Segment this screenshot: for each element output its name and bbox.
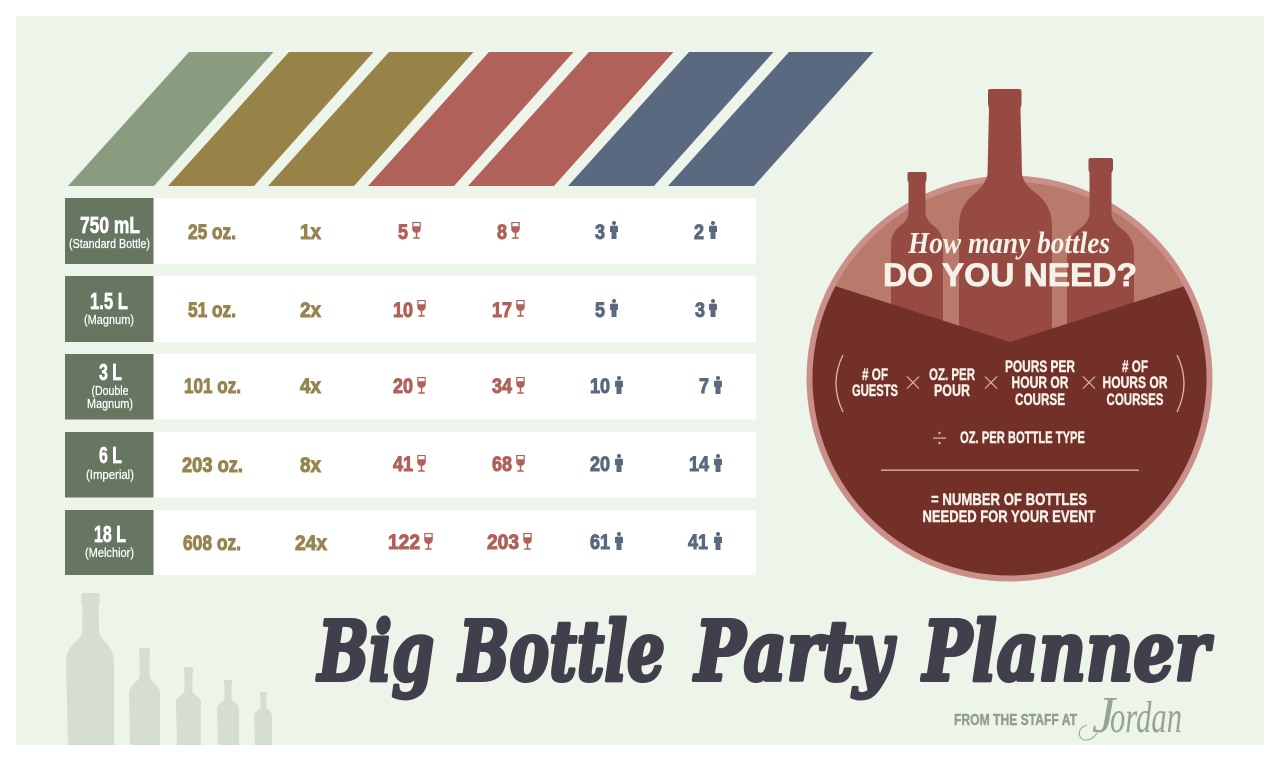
formula: times — [907, 376, 919, 388]
row: 3 L — [65, 354, 756, 420]
icon: wine glass — [523, 533, 532, 550]
formula: oz per bottle type: OZ. PER BOTTLE TYPE — [960, 428, 1085, 447]
size name: (Standard Bottle) — [69, 236, 150, 251]
banner: bottle size — [68, 52, 274, 186]
formula: times — [1083, 376, 1095, 388]
dark formula panel — [812, 286, 1206, 576]
guests B: 7 — [699, 375, 709, 398]
icon: left bottle — [891, 172, 943, 340]
formula: times — [985, 376, 997, 388]
pours A: 122 — [388, 531, 420, 554]
multiplier: 4x — [300, 375, 321, 398]
icon: smaller bottle — [217, 680, 239, 745]
ounces: 608 oz. — [183, 532, 241, 555]
title: Bottle — [458, 604, 665, 700]
icon: person — [714, 454, 722, 472]
heading script: How many bottles — [907, 225, 1110, 260]
icon: person — [610, 221, 618, 239]
decorative bottle sizes — [66, 593, 272, 745]
size name: (Double — [92, 383, 128, 398]
guests A: 20 — [590, 453, 610, 476]
guests B: 3 — [695, 299, 705, 322]
logo wordmark: ordan — [1110, 693, 1182, 742]
title: Big — [317, 604, 434, 700]
icon: person — [615, 454, 623, 472]
formula: left parenthesis — [836, 355, 843, 412]
size label: 18 L — [94, 521, 126, 547]
logo wordmark: J — [1092, 687, 1118, 744]
formula: pours per hour: POURS PER — [1005, 357, 1075, 376]
icon: wine glass — [412, 222, 421, 239]
size label: 750 mL — [80, 212, 140, 238]
guests A: 10 — [590, 375, 610, 398]
formula: divide sign — [933, 432, 946, 444]
size label: 3 L — [99, 359, 122, 385]
size name: (Imperial) — [86, 467, 134, 482]
ounces: 203 oz. — [182, 454, 243, 477]
formula: hours: COURSES — [1106, 390, 1164, 409]
icon: wine glass — [417, 300, 426, 317]
heading bold: DO YOU NEED? — [883, 257, 1137, 293]
icon: right bottle — [1067, 158, 1134, 340]
pours B: 68 — [492, 453, 512, 476]
icon: small bottle — [176, 667, 201, 745]
formula: right parenthesis — [1177, 355, 1184, 412]
icon: person — [615, 376, 623, 394]
size name: (Magnum) — [84, 312, 134, 327]
title: Planner — [921, 604, 1214, 700]
banner: pours 3 oz — [468, 52, 674, 186]
pours B: 203 — [487, 531, 519, 554]
credit text: FROM THE STAFF AT — [954, 712, 1077, 729]
banner: equivalent bottles — [268, 52, 474, 186]
formula: oz per pour: OZ. PER — [929, 365, 975, 384]
guests A: 61 — [590, 531, 610, 554]
title: Party — [693, 604, 896, 700]
size name line 2: Magnum) — [87, 396, 133, 411]
credit — [954, 687, 1182, 744]
banner: pours 5 oz — [368, 52, 574, 186]
guests B: 14 — [689, 453, 709, 476]
pours A: 41 — [393, 453, 413, 476]
row: 1.5 L — [65, 276, 756, 342]
pours A: 5 — [398, 221, 408, 244]
guests A: 3 — [595, 221, 605, 244]
icon: person — [714, 532, 722, 550]
icon: person — [610, 299, 618, 317]
ounces: 25 oz. — [188, 221, 236, 244]
formula: result: = NUMBER OF BOTTLES — [931, 490, 1087, 509]
icon: wine glass — [511, 222, 520, 239]
formula: hours: HOURS OR — [1102, 373, 1168, 392]
icon: smallest bottle — [254, 692, 272, 745]
icon: wine glass — [424, 533, 433, 550]
row: 6 L — [65, 432, 756, 498]
formula: result: NEEDED FOR YOUR EVENT — [922, 507, 1096, 526]
icon: wine glass — [516, 377, 525, 394]
formula: guests: GUESTS — [852, 381, 898, 400]
multiplier: 8x — [300, 454, 321, 477]
size name: (Melchior) — [85, 545, 134, 560]
formula: pours per hour: COURSE — [1015, 390, 1065, 409]
formula: guests: # OF — [862, 365, 888, 384]
ounces: 101 oz. — [184, 375, 241, 398]
pours A: 10 — [393, 299, 413, 322]
panel: how many bottles circle — [800, 89, 1220, 590]
formula: oz per pour: POUR — [934, 381, 970, 400]
icon: person — [615, 532, 623, 550]
icon: wine glass — [516, 300, 525, 317]
icon: large bottle — [66, 593, 114, 745]
size label: 6 L — [99, 442, 122, 468]
formula: hours: # OF — [1122, 357, 1148, 376]
guests B: 2 — [694, 221, 704, 244]
icon: person — [709, 299, 717, 317]
banner: guests B — [668, 52, 874, 186]
pours B: 34 — [492, 375, 512, 398]
guests B: 41 — [688, 531, 708, 554]
multiplier: 24x — [295, 532, 327, 555]
banner: ounces — [168, 52, 374, 186]
logo swash — [1079, 725, 1097, 740]
pours A: 20 — [393, 375, 413, 398]
formula: pours per hour: HOUR OR — [1012, 373, 1068, 392]
ounces: 51 oz. — [188, 299, 236, 322]
icon: medium bottle — [129, 648, 160, 745]
icon: centre bottle — [959, 89, 1052, 345]
guests A: 5 — [595, 299, 605, 322]
pours B: 8 — [497, 221, 507, 244]
row: 18 L — [65, 510, 756, 575]
column header banners — [68, 52, 874, 186]
multiplier: 2x — [300, 299, 321, 322]
row: 750 mL — [65, 198, 756, 264]
icon: wine glass — [417, 455, 426, 472]
icon: person — [714, 376, 722, 394]
icon: person — [709, 221, 717, 239]
size label: 1.5 L — [90, 288, 128, 314]
multiplier: 1x — [300, 221, 321, 244]
banner: guests A — [568, 52, 774, 186]
icon: wine glass — [417, 377, 426, 394]
icon: wine glass — [516, 455, 525, 472]
pours B: 17 — [492, 299, 512, 322]
